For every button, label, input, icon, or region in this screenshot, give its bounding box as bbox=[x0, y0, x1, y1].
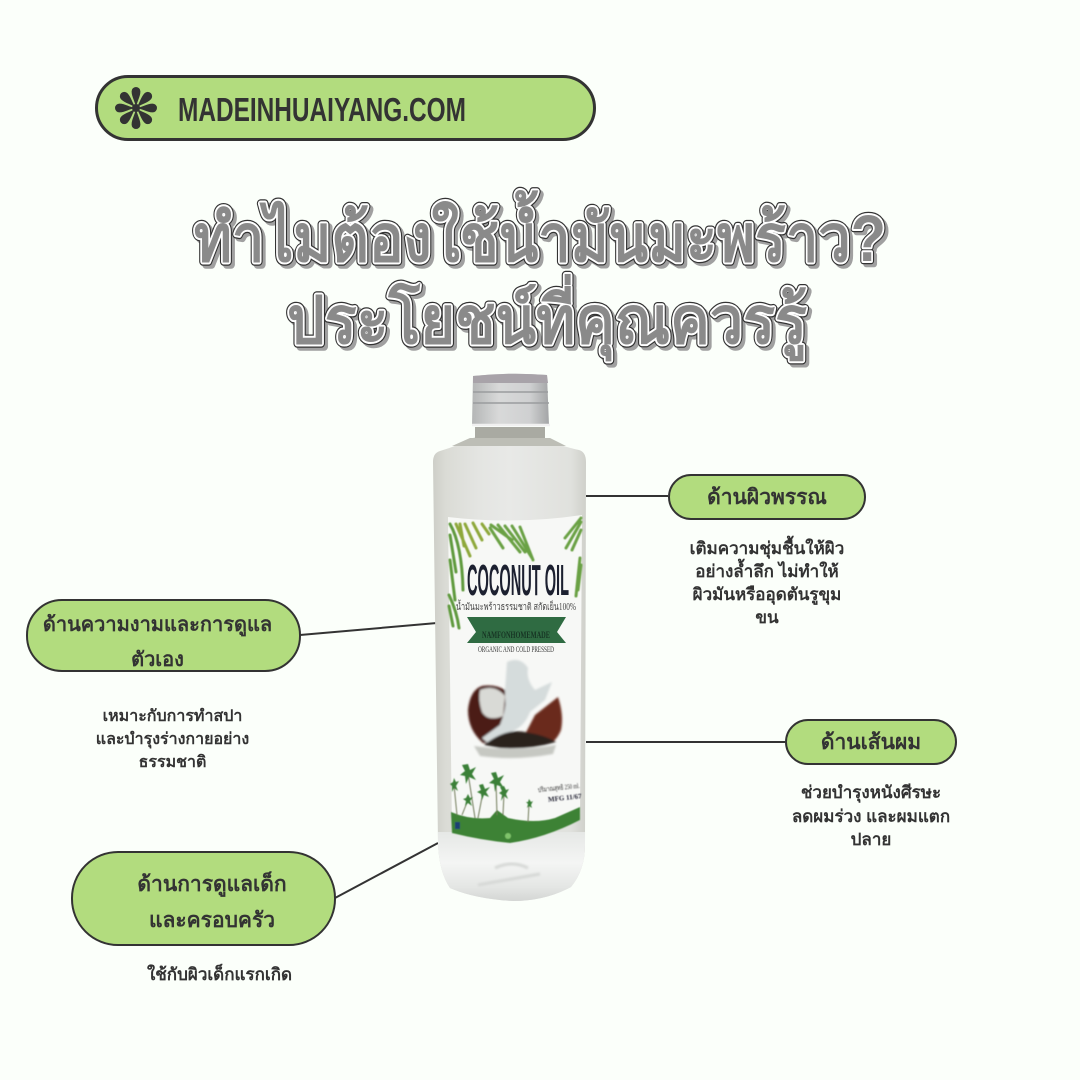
text: hair: ลดผมร่วง และผมแตก bbox=[792, 806, 950, 826]
icon: flower bbox=[115, 87, 157, 129]
heading: skin: ด้านผิวพรรณ bbox=[707, 486, 827, 509]
title: ทำไมต้องใช้น้ำมันมะพร้าว? bbox=[194, 189, 886, 275]
panel: hair bbox=[785, 719, 957, 849]
product: coconut oil bottle bbox=[433, 374, 586, 901]
bottle cap bbox=[472, 374, 549, 425]
text: beauty bbox=[96, 708, 249, 771]
heading: beauty: ด้านความงามและการดูแล bbox=[43, 614, 272, 636]
panel: beauty bbox=[26, 599, 301, 771]
product: coconut oil bottle: NAMFONHOMEMADE bbox=[482, 630, 550, 640]
green ribbon bbox=[467, 617, 566, 643]
text: skin: อย่างล้ำลึก ไม่ทำให้ bbox=[695, 562, 839, 581]
text: skin: ขน bbox=[755, 608, 779, 627]
heading: beauty bbox=[26, 599, 301, 672]
text: skin: เติมความชุ่มชื้นให้ผิว bbox=[690, 539, 844, 558]
title: ประโยชน์ที่คุณควรรู้ bbox=[287, 273, 807, 362]
text: hair: ช่วยบำรุงหนังศีรษะ bbox=[801, 783, 941, 802]
bottle body bbox=[433, 427, 586, 901]
heading: hair: ด้านเส้นผม bbox=[821, 731, 921, 754]
heading: family bbox=[71, 851, 336, 946]
label bbox=[448, 515, 582, 843]
text: skin: ผิวมันหรืออุดตันรูขุม bbox=[693, 585, 841, 604]
title: ทำไมต้องใช้น้ำมันมะพร้าว? bbox=[194, 189, 886, 275]
heading: hair bbox=[785, 719, 957, 765]
heading: family: และครอบครัว bbox=[149, 909, 275, 932]
heading: beauty: ตัวเอง bbox=[131, 649, 184, 671]
title: ประโยชน์ที่คุณควรรู้ bbox=[290, 276, 810, 365]
organic line: ORGANIC AND COLD PRESSED bbox=[478, 645, 554, 654]
text: hair: ปลาย bbox=[851, 830, 891, 849]
palm trees and footer: ปริมาณสุทธิ 250 ml. bbox=[537, 782, 580, 794]
palm trees and footer bbox=[450, 764, 582, 843]
coconut splash bbox=[468, 660, 562, 758]
palm trees and footer: MFG 11/67 bbox=[548, 792, 582, 804]
title: ทำไมต้องใช้น้ำมันมะพร้าว? bbox=[194, 189, 886, 275]
heading: skin bbox=[668, 474, 866, 520]
title: ประโยชน์ที่คุณควรรู้ bbox=[287, 273, 807, 362]
text: beauty: และบำรุงร่างกายอย่าง bbox=[96, 731, 249, 748]
text: beauty: เหมาะกับการทำสปา bbox=[103, 708, 242, 725]
text: family: ใช้กับผิวเด็กแรกเกิด bbox=[147, 965, 292, 984]
website banner bbox=[95, 75, 596, 141]
panel: skin bbox=[668, 474, 866, 627]
text: hair bbox=[792, 783, 950, 849]
text: beauty: ธรรมชาติ bbox=[139, 754, 206, 771]
panel: family bbox=[71, 851, 336, 984]
palm leaves bbox=[449, 518, 581, 628]
title: ทำไมต้องใช้น้ำมันมะพร้าว? bbox=[197, 192, 889, 278]
text: skin bbox=[690, 536, 844, 627]
heading: family: ด้านการดูแลเด็ก bbox=[137, 873, 287, 896]
title: ประโยชน์ที่คุณควรรู้ bbox=[287, 273, 807, 362]
title bbox=[192, 186, 889, 368]
